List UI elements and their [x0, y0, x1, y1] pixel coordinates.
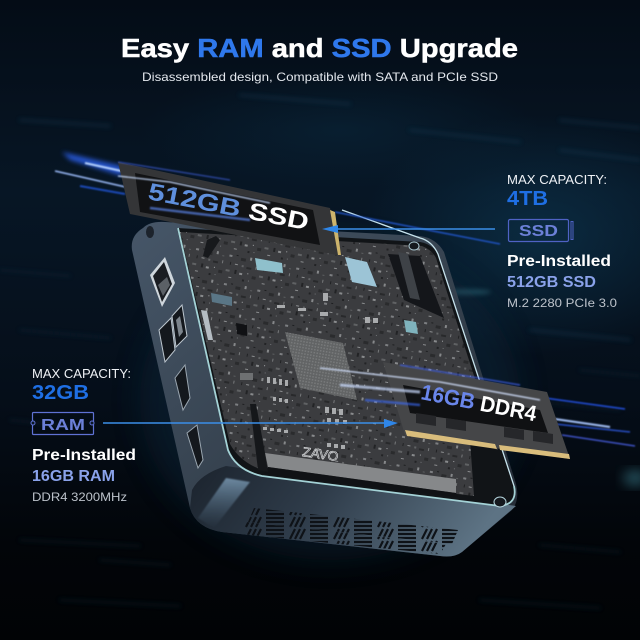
- inner bay: [177, 228, 515, 506]
- mini PC device: [132, 210, 520, 560]
- corner highlight: [198, 478, 250, 528]
- black chip: [236, 323, 247, 336]
- USB ports: [159, 305, 187, 362]
- SSD max capacity value: 4TB: [507, 188, 548, 210]
- ethernet port: [150, 257, 175, 307]
- SSD badge: SSD: [519, 223, 558, 240]
- heat pad small: [255, 258, 283, 273]
- small teal chip: [404, 320, 418, 334]
- RAM capacity text: 16GB DDR4: [419, 379, 539, 426]
- HDMI port 2: [187, 425, 203, 468]
- RAM badge: RAM: [41, 417, 85, 434]
- SSD pre-installed heading: Pre-Installed: [507, 253, 611, 270]
- RAM module: [320, 362, 570, 459]
- RAM chips: [416, 413, 553, 444]
- device body shell: [132, 222, 517, 556]
- silkscreen logo: ZAVO: [302, 444, 339, 464]
- SSD capacity text: 512GB SSD: [146, 178, 311, 236]
- RAM max capacity value: 32GB: [32, 382, 89, 404]
- RAM gold contacts: [405, 430, 497, 449]
- SSD streak overlays: [118, 162, 270, 220]
- main chip: [285, 332, 357, 400]
- screw hole top left: [146, 226, 154, 238]
- dark gap below grey strip: [264, 467, 458, 497]
- SSD black label: [135, 173, 320, 245]
- edge connector: [201, 310, 213, 340]
- rim highlight left and bottom: [178, 228, 515, 506]
- memory chip on board: [211, 293, 232, 306]
- SSD interface: M.2 2280 PCIe 3.0: [507, 296, 617, 310]
- heat pad large: [345, 257, 377, 287]
- RAM pre-installed size: 16GB RAM: [32, 468, 115, 485]
- bright board parts: [240, 293, 378, 449]
- screw hole bottom right: [494, 497, 506, 507]
- RAM streak overlays: [320, 365, 540, 405]
- RAM pre-installed heading: Pre-Installed: [32, 447, 136, 464]
- RAM gold contacts right: [499, 445, 570, 459]
- circuit board: [180, 232, 498, 496]
- RAM spec panel: [31, 366, 136, 504]
- SSD max capacity label: MAX CAPACITY:: [507, 172, 607, 187]
- SSD gold contacts: [330, 210, 341, 255]
- SSD PCB: [118, 162, 342, 256]
- SSD module: [118, 162, 342, 256]
- SSD pre-installed size: 512GB SSD: [507, 274, 596, 291]
- RAM black label: [403, 385, 548, 433]
- rim highlight back and right: [342, 210, 514, 486]
- screw hole top right: [409, 242, 419, 250]
- black cylinder jack: [203, 236, 220, 258]
- bottom vents: [240, 508, 458, 554]
- SSD light streaks behind: [55, 152, 500, 244]
- SSD pointer line: [322, 225, 495, 233]
- front face: [190, 466, 516, 556]
- RAM pointer line: [103, 419, 398, 428]
- lower grey strip: [265, 453, 456, 493]
- RAM streaks behind: [545, 398, 635, 446]
- dark notch by strip: [250, 404, 268, 472]
- board right socket dark area: [388, 254, 444, 318]
- RAM speed: DDR4 3200MHz: [32, 490, 127, 504]
- subtitle: Disassembled design, Compatible with SATA and PCIe SSD: [142, 70, 498, 84]
- m.2 connector: [398, 252, 420, 300]
- RAM max capacity label: MAX CAPACITY:: [32, 366, 131, 381]
- SSD spec panel: [507, 172, 617, 310]
- RAM PCB: [383, 362, 570, 459]
- device shadow glow: [140, 240, 520, 560]
- HDMI port 1: [175, 365, 190, 410]
- title: Easy RAM and SSD Upgrade: [121, 33, 518, 63]
